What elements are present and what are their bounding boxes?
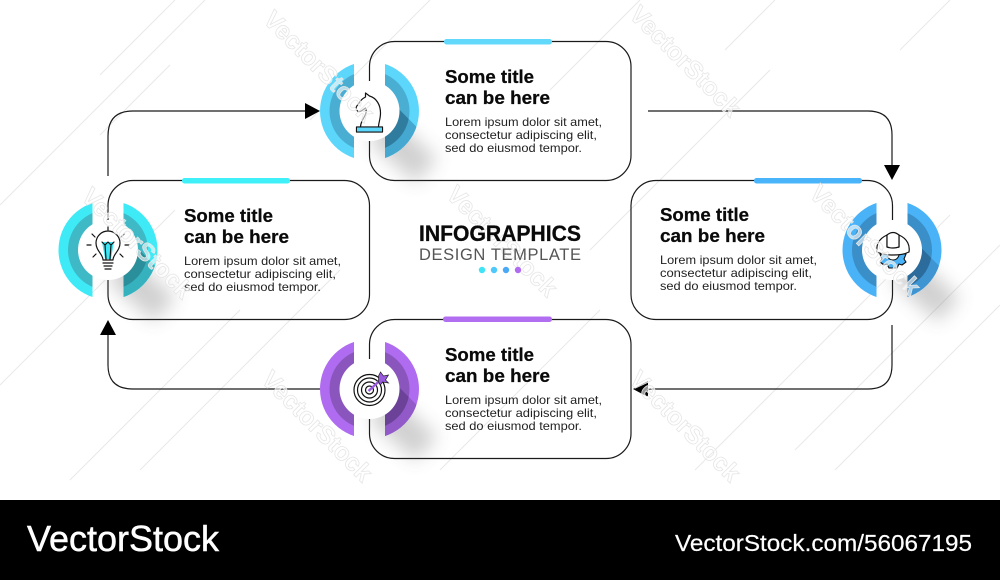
watermark text: VectorStock <box>804 179 926 301</box>
node: left idea <box>58 200 176 322</box>
text: bottom card: consectetur adipiscing elit, <box>445 406 597 420</box>
icon: chess knight <box>356 93 382 132</box>
text: top card: Some title <box>445 66 534 87</box>
footer logo: VectorStock <box>27 518 220 559</box>
footer band <box>0 500 1000 580</box>
text: right card: Some title <box>660 204 749 225</box>
accent bar: right <box>754 178 862 184</box>
watermark text: VectorStock <box>258 5 380 127</box>
watermark text <box>76 0 926 487</box>
text: left card: sed do eiusmod tempor. <box>184 280 321 294</box>
watermark text: VectorStock <box>441 180 563 302</box>
arrow: bottom to left <box>100 320 320 389</box>
card: top <box>370 42 631 180</box>
watermark text: VectorStock <box>76 182 198 304</box>
text: bottom card: sed do eiusmod tempor. <box>445 419 582 433</box>
text: right card: sed do eiusmod tempor. <box>660 279 797 293</box>
watermark text: VectorStock <box>256 365 378 487</box>
text: bottom card: Some title <box>445 344 534 365</box>
progress dots <box>479 267 521 273</box>
arrow: top to right <box>648 111 900 180</box>
text: left card: Lorem ipsum dolor sit amet, <box>184 254 341 268</box>
text: bottom card: Lorem ipsum dolor sit amet, <box>445 393 602 407</box>
icon: target with dart <box>354 372 388 406</box>
watermark text: VectorStock <box>624 0 746 122</box>
watermark text: VectorStock <box>624 365 746 487</box>
icon: light bulb <box>87 227 129 269</box>
text: top card: can be here <box>445 87 550 108</box>
arrow: right to bottom <box>633 325 892 397</box>
card: bottom <box>370 320 631 458</box>
accent bar: top <box>444 39 552 44</box>
node: bottom target <box>320 340 438 461</box>
text: top card: sed do eiusmod tempor. <box>445 141 582 155</box>
text: right card: Lorem ipsum dolor sit amet, <box>660 253 817 267</box>
central title <box>419 221 581 264</box>
text: right card <box>660 204 817 293</box>
card: right <box>631 180 892 320</box>
text: top card: Lorem ipsum dolor sit amet, <box>445 115 602 129</box>
text: bottom card: can be here <box>445 365 550 386</box>
text: left card: Some title <box>184 205 273 226</box>
text: top card: consectetur adipiscing elit, <box>445 128 597 142</box>
node: top strategy <box>320 62 438 183</box>
node: right engineering <box>842 200 960 322</box>
footer url: VectorStock.com/56067195 <box>675 530 972 556</box>
central title: INFOGRAPHICS <box>419 221 581 246</box>
accent bar: bottom <box>443 316 552 322</box>
text: left card <box>184 205 341 294</box>
accent bar: left <box>182 178 290 184</box>
text: right card: consectetur adipiscing elit, <box>660 266 812 280</box>
text: top card <box>445 66 602 155</box>
text: right card: can be here <box>660 225 765 246</box>
card: left <box>108 180 370 320</box>
text: left card: consectetur adipiscing elit, <box>184 267 336 281</box>
icon: helmet and gear <box>877 232 909 268</box>
text: bottom card <box>445 344 602 433</box>
central title: DESIGN TEMPLATE <box>419 246 581 264</box>
arrow: left to top <box>108 103 320 176</box>
text: left card: can be here <box>184 226 289 247</box>
